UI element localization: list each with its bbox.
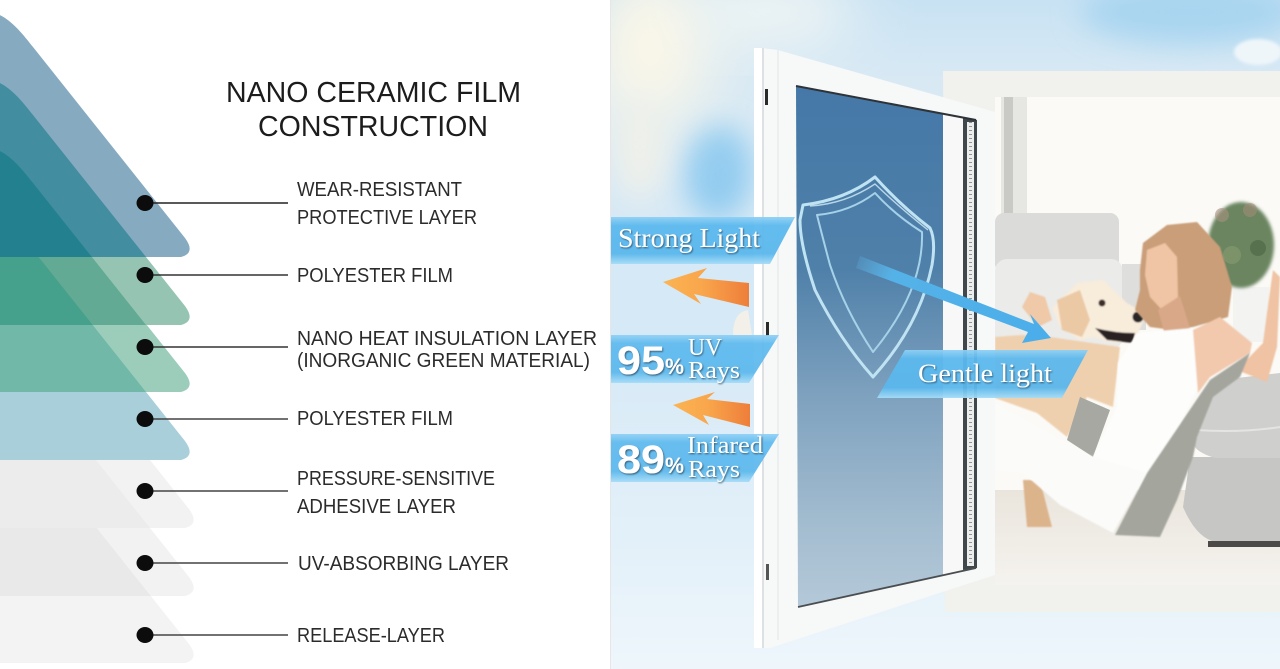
heading: nano ceramic film construction: NANO CERAMIC FILM [226, 77, 521, 109]
eye [1098, 300, 1106, 306]
ribbon: gentle light [877, 350, 1088, 398]
room behind the window [943, 71, 1280, 612]
hinges [765, 89, 768, 105]
blue tinted glass [796, 86, 943, 607]
face [1145, 243, 1178, 310]
heading: nano ceramic film construction [226, 77, 521, 143]
glass bottom edge [798, 568, 976, 607]
arrow: gentle light passing through [856, 256, 1051, 343]
ribbon: 89% infared rays: 89 [617, 438, 665, 482]
ear [1057, 290, 1090, 337]
layer: release layer [0, 596, 194, 663]
callout: release layer [136, 625, 445, 647]
callout: pressure-sensitive adhesive layer [136, 468, 495, 518]
callout: uv-absorbing layer: UV-ABSORBING LAYER [298, 553, 509, 575]
arrow: orange reflected light upper [663, 268, 749, 307]
shirt [1093, 328, 1199, 473]
ribbon: 95% uv rays [610, 335, 779, 384]
arrow: orange reflected light lower [673, 392, 750, 427]
dog [995, 280, 1144, 527]
paw on head [1022, 292, 1052, 327]
sofa arm and base [1183, 373, 1280, 547]
outer frame [762, 48, 995, 648]
panel divider [610, 0, 612, 669]
ribbon: 89% infared rays [610, 433, 779, 483]
neck [1158, 296, 1190, 332]
callout: nano heat insulation layer: NANO HEAT INSULATION LAYER [297, 328, 597, 350]
ribbon: 89% infared rays: Rays [688, 457, 740, 483]
heading: nano ceramic film construction: CONSTRUCTION [258, 111, 488, 143]
bead [963, 118, 977, 570]
callout: uv-absorbing layer [136, 553, 509, 575]
room wall [995, 97, 1280, 497]
ribbon: gentle light: Gentle light [918, 359, 1053, 388]
callout: pressure-sensitive adhesive layer: PRESSURE-SENSITIVE [297, 468, 495, 490]
callout: nano heat insulation layer [136, 328, 597, 372]
ribbon: 95% uv rays: % [665, 354, 684, 379]
callout: wear-resistant protective layer: PROTECTIVE LAYER [297, 207, 477, 229]
hinge strip [754, 48, 764, 648]
callout: polyester film: POLYESTER FILM [297, 408, 453, 430]
layer: nano heat insulation [0, 325, 190, 392]
callout: release layer: RELEASE-LAYER [297, 625, 445, 647]
floor [995, 490, 1206, 540]
callout: wear-resistant protective layer: WEAR-RESISTANT [297, 179, 462, 201]
leg [1023, 480, 1052, 527]
callout: nano heat insulation layer: (INORGANIC GREEN MATERIAL) [297, 350, 590, 372]
curtain strip [1001, 97, 1027, 217]
layer: wear-resistant protective layer [0, 15, 190, 257]
window sash [754, 48, 995, 648]
sky background [590, 0, 1280, 669]
plant [1207, 200, 1276, 292]
hair [1135, 222, 1232, 330]
woman [1030, 221, 1280, 538]
handle [733, 310, 752, 335]
layer: polyester film lower [0, 392, 190, 460]
ribbon: 89% infared rays: Infared [687, 433, 763, 459]
mouth [1095, 328, 1135, 343]
window frame of room [943, 71, 1280, 612]
layer: pressure-sensitive adhesive [0, 460, 194, 528]
sofa back cushions [995, 213, 1146, 349]
layer: polyester film [0, 257, 190, 325]
ribbon: 95% uv rays: 95 [617, 339, 665, 383]
pants [1030, 452, 1146, 532]
white reveal strip [943, 114, 963, 575]
head [1052, 280, 1143, 343]
ribbon: 89% infared rays: % [665, 453, 684, 478]
icon: glass shield [800, 177, 934, 377]
callout: polyester film [136, 408, 453, 430]
glass top edge [796, 86, 976, 120]
callout: polyester film [136, 265, 453, 287]
body [995, 335, 1120, 437]
gray fabric beside dog [1067, 397, 1110, 457]
callout: wear-resistant protective layer [136, 179, 477, 229]
ribbon: 95% uv rays: UV [688, 335, 723, 361]
callout: pressure-sensitive adhesive layer: ADHESIVE LAYER [297, 496, 456, 518]
nose [1132, 312, 1144, 322]
callout: polyester film: POLYESTER FILM [297, 265, 453, 287]
arm [1242, 270, 1280, 382]
blanket [1115, 353, 1250, 537]
panel: film layer stack [0, 13, 194, 663]
layer: uv-absorbing [0, 528, 194, 596]
ribbon: strong light [610, 217, 795, 264]
ribbon: 95% uv rays: Rays [688, 358, 740, 384]
ribbon: strong light: Strong Light [618, 223, 761, 253]
peach sweater [1193, 317, 1252, 393]
panel: window scene [590, 0, 1280, 669]
